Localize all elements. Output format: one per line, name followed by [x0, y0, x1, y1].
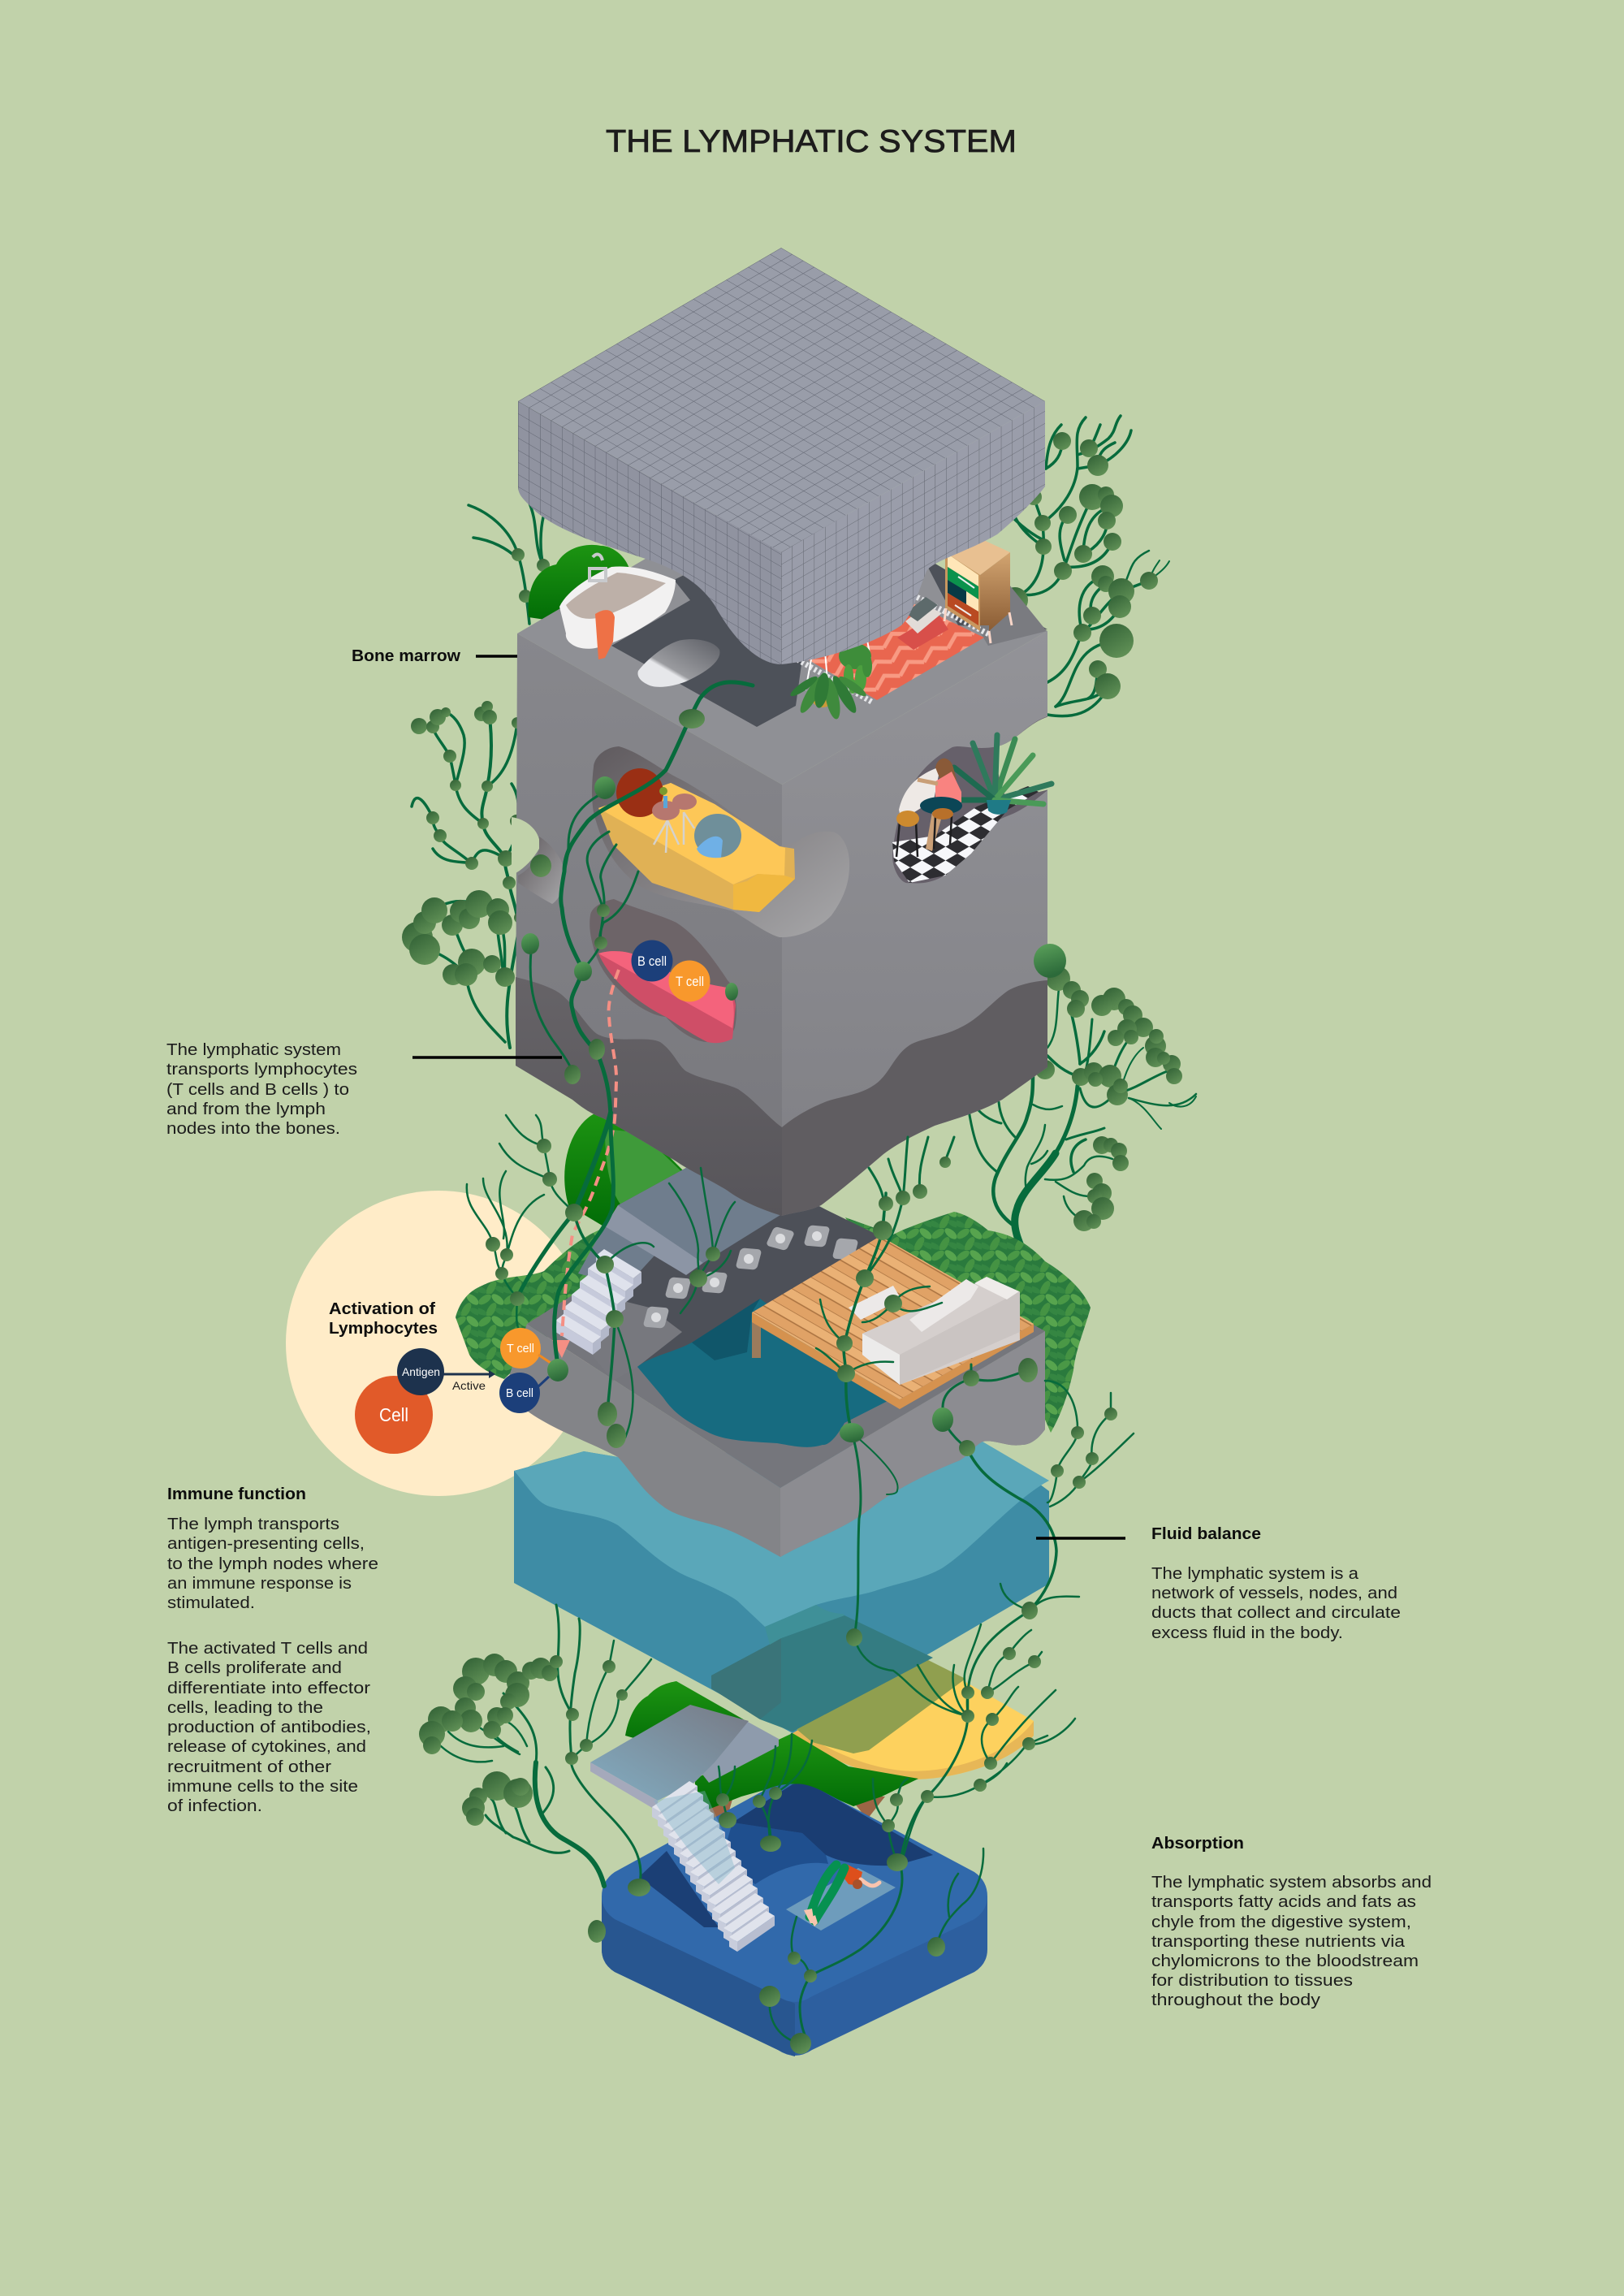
text: absorption: transports fatty acids and fats as — [1151, 1893, 1416, 1911]
right face — [782, 631, 1047, 1216]
palm plant — [946, 735, 1052, 804]
yellow platform — [598, 783, 795, 912]
submerged stone — [711, 1615, 933, 1732]
rug — [802, 588, 984, 700]
active node — [547, 1359, 568, 1381]
text: lymphocyte transport: and from the lymph — [166, 1100, 326, 1118]
water surface band — [514, 1442, 1049, 1627]
text: lymphocyte transport: The lymphatic system — [166, 1041, 341, 1059]
checker floor — [892, 786, 1039, 883]
bush: garden above lymph node — [564, 1109, 690, 1234]
water block — [514, 1442, 1049, 1753]
text: fluid balance: excess fluid in the body. — [1151, 1624, 1343, 1642]
left side — [602, 1896, 795, 2056]
text: immune function: antigen-presenting cells, — [167, 1535, 365, 1553]
text: immune function: release of cytokines, and — [167, 1738, 366, 1756]
text: absorption: for distribution to tissues — [1151, 1972, 1353, 1990]
lower green hedge — [695, 1733, 918, 1811]
active arrow — [443, 1370, 495, 1392]
garden light foliage — [605, 1129, 686, 1210]
dark courtyard — [605, 1168, 909, 1381]
T cell in bone — [669, 960, 710, 1002]
text: immune function: to the lymph nodes where — [167, 1555, 378, 1573]
bush: left leaves at lymph node — [456, 1227, 617, 1379]
top surface — [517, 479, 1047, 785]
activation of lymphocytes diagram — [329, 1300, 568, 1454]
glass pouf — [694, 814, 741, 858]
text: fluid balance: Fluid balance — [1151, 1525, 1261, 1543]
text: immune function: cells, leading to the — [167, 1699, 323, 1717]
T cell arrow — [538, 1355, 551, 1363]
cell: Cell — [379, 1404, 408, 1425]
yellow room cave — [592, 746, 849, 937]
white wall — [899, 767, 940, 820]
text: fluid balance — [1151, 1525, 1401, 1642]
lymph vines in front of the blocks — [441, 682, 1134, 2043]
lymph node block — [508, 1168, 1045, 1557]
B cell in bone: B cell — [637, 953, 667, 969]
text: absorption: throughout the body — [1151, 1991, 1320, 2009]
lower dark band left — [516, 977, 782, 1216]
text: fluid balance: network of vessels, nodes, and — [1151, 1585, 1397, 1602]
lymph nodes behind the upper blocks — [402, 432, 1182, 1231]
shadow on top surface — [611, 552, 1047, 727]
active arrow: Active — [452, 1379, 486, 1392]
hole — [892, 716, 1047, 883]
B cell: B cell — [506, 1386, 533, 1400]
deck legs — [752, 1316, 761, 1358]
left notch — [512, 817, 540, 876]
stairs down to pool — [652, 1781, 775, 1952]
bush behind top block — [529, 545, 629, 625]
bone marrow block — [512, 479, 1052, 1216]
text: fluid balance: The lymphatic system is a — [1151, 1565, 1359, 1583]
T cell — [500, 1328, 541, 1369]
white stairs — [555, 1249, 641, 1355]
arms — [861, 1879, 879, 1886]
woman — [918, 759, 962, 851]
dresser — [944, 538, 1012, 643]
text: lymphocyte transport — [166, 1041, 357, 1138]
text: absorption: transporting these nutrients via — [1151, 1933, 1406, 1951]
top surface — [527, 1202, 1045, 1488]
text: immune function: production of antibodies, — [167, 1719, 371, 1736]
stepping stones — [642, 1225, 859, 1329]
mat — [786, 1868, 896, 1931]
side tables — [652, 787, 697, 853]
text: absorption: chyle from the digestive system, — [1151, 1913, 1411, 1931]
grey floor beside stairs — [586, 1299, 682, 1381]
text: immune function: The lymph transports — [167, 1516, 339, 1533]
text: absorption: The lymphatic system absorbs and — [1151, 1874, 1432, 1892]
water sand and lower garden — [625, 1658, 1034, 1827]
text: immune function: B cells proliferate and — [167, 1659, 342, 1677]
upper steps — [686, 1721, 779, 1783]
stairs platform — [590, 1705, 779, 1952]
landing top — [590, 1705, 749, 1801]
heading: Activation of — [329, 1300, 435, 1318]
planter — [987, 800, 1011, 815]
hanging plant — [839, 643, 872, 694]
activation circle background — [286, 1191, 591, 1496]
pink platform — [598, 951, 736, 1043]
antigen — [397, 1348, 444, 1395]
text: immune function: of infection. — [167, 1797, 262, 1815]
deck side — [752, 1312, 1034, 1409]
title: THE LYMPHATIC SYSTEM — [606, 124, 1017, 159]
submerged stone shadow — [711, 1638, 781, 1719]
T cell: T cell — [507, 1342, 534, 1356]
torso — [841, 1864, 862, 1886]
T cell in bone: T cell — [676, 974, 704, 989]
top tiled cube — [518, 248, 1045, 664]
stair shadow — [639, 1851, 719, 1927]
upper stone stairs — [578, 1168, 780, 1286]
block body — [508, 1324, 1045, 1557]
tree trunks — [708, 1791, 885, 1827]
red pouf — [616, 768, 663, 817]
text: immune function: an immune response is — [167, 1575, 352, 1593]
text: immune function: differentiate into effector — [167, 1680, 370, 1697]
lit floor beside dresser — [966, 585, 1047, 646]
pillows — [897, 597, 948, 650]
text: lymphocyte transport: (T cells and B cells ) to — [166, 1081, 349, 1099]
lymph vines behind the upper blocks — [412, 416, 1196, 1260]
legs — [810, 1865, 844, 1921]
landing side — [590, 1762, 658, 1811]
tile top face — [518, 248, 1045, 552]
text: lymphocyte transport: nodes into the bones. — [166, 1120, 340, 1138]
feet — [804, 1909, 818, 1926]
bath tub — [559, 555, 676, 659]
text: immune function: The activated T cells and — [167, 1640, 368, 1658]
B cell arrow — [538, 1377, 549, 1387]
pool — [637, 1299, 894, 1447]
hanging plant strings — [806, 605, 870, 690]
heading — [329, 1300, 438, 1338]
text: absorption — [1151, 1835, 1432, 2009]
water volume — [514, 1442, 1049, 1733]
blue base block — [602, 1784, 987, 2056]
pointer line: lymphocyte transport — [412, 1056, 562, 1059]
antigen: Antigen — [402, 1365, 440, 1378]
B cell in bone — [632, 940, 672, 981]
dashed lymphocyte path arrow — [552, 970, 619, 1358]
yoga figure on mat — [786, 1864, 896, 1931]
text: lymphocyte transport: transports lymphocytes — [166, 1061, 357, 1079]
left face — [516, 633, 782, 1216]
stools — [896, 808, 953, 857]
deck shadow on pool — [692, 1299, 760, 1360]
cast shadow — [732, 1784, 933, 1866]
tile right face — [781, 401, 1045, 664]
left cave — [518, 837, 564, 904]
B cell — [499, 1373, 540, 1413]
lower dark band right — [782, 980, 1047, 1216]
right side — [780, 1331, 1045, 1557]
head — [853, 1879, 862, 1889]
window room — [892, 716, 1052, 883]
top surface — [602, 1784, 987, 2002]
upper green hedge — [625, 1681, 746, 1754]
yellow sand platform — [793, 1658, 1034, 1779]
sand rim — [793, 1721, 1034, 1779]
water tint on stairs — [654, 1791, 735, 1884]
cell — [355, 1376, 433, 1454]
tile left face — [518, 401, 781, 664]
mid shadow — [723, 1823, 828, 1884]
rug fringe — [797, 582, 991, 703]
text: immune function: immune cells to the site — [167, 1778, 358, 1796]
lymph nodes in front of the blocks — [419, 709, 1117, 2054]
sand seen through water — [793, 1658, 965, 1753]
heading: Lymphocytes — [329, 1320, 438, 1338]
white sofa — [849, 1277, 1020, 1385]
label: bone marrow: Bone marrow — [352, 647, 460, 665]
text: fluid balance: ducts that collect and circulate — [1151, 1604, 1401, 1622]
oval drain — [637, 639, 719, 687]
text: immune function: Immune function — [167, 1485, 306, 1503]
deck top — [752, 1236, 1034, 1399]
submerged stone foam — [765, 1605, 844, 1645]
base sides — [602, 1896, 987, 2056]
pink room cave — [590, 899, 736, 1042]
text: absorption: chylomicrons to the bloodstream — [1151, 1952, 1419, 1970]
garden stone platform under bone block — [618, 1168, 731, 1263]
text: immune function: stimulated. — [167, 1594, 255, 1612]
inner stair ledge — [605, 1205, 703, 1275]
bush: right leaves at lymph node — [845, 1212, 1091, 1433]
text: absorption: Absorption — [1151, 1835, 1244, 1853]
text: immune function — [167, 1485, 378, 1815]
text: immune function: recruitment of other — [167, 1758, 331, 1776]
notch background — [996, 716, 1049, 800]
potted plant — [788, 672, 868, 720]
pointer line: fluid balance — [1036, 1537, 1125, 1540]
